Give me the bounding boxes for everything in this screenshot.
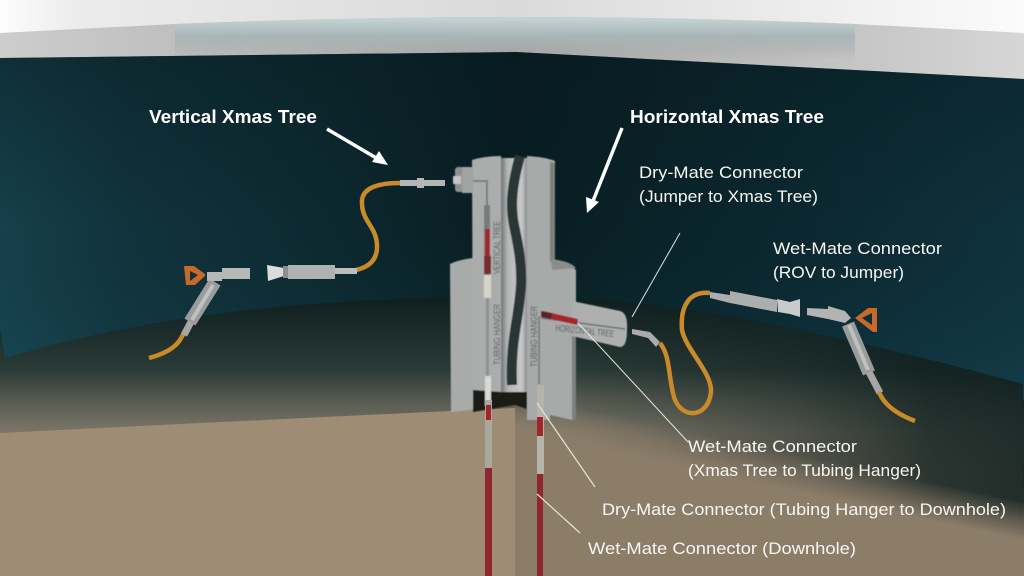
label: tubing hanger left: TUBING HANGER [492, 304, 503, 365]
label: dry-mate hanger to downhole: Dry-Mate Connector (Tubing Hanger to Downhole) [602, 501, 1006, 519]
angled steel body [848, 324, 880, 393]
ceiling band [0, 0, 1024, 60]
flared head [777, 299, 800, 317]
horizontal tree arm [541, 301, 627, 347]
pipe: vertical tree and hanger [473, 181, 491, 406]
orange tail cable [149, 333, 184, 358]
curved teal wall [0, 52, 1024, 400]
right flange [550, 259, 576, 420]
angled steel body [184, 282, 215, 335]
ledge above wall [0, 17, 1024, 85]
left upper cylinder [472, 156, 501, 392]
orange handle [184, 266, 205, 285]
central wellhead cutaway [450, 156, 627, 420]
steel plug [207, 268, 250, 281]
jumper cable [356, 183, 400, 270]
leader: hanger to downhole [537, 403, 595, 487]
leader: tree to hanger [578, 323, 688, 442]
right jumper [632, 291, 800, 413]
steel plug [807, 306, 851, 323]
left flange [450, 258, 473, 412]
dry-mate end [400, 178, 445, 188]
downhole string right [537, 385, 544, 576]
label: dry-mate jumper to tree: (Jumper to Xmas Tree) [639, 188, 818, 206]
jumper cable [660, 293, 711, 413]
downhole string left [485, 400, 492, 576]
orange tail cable [879, 392, 915, 421]
dry-mate end [632, 329, 660, 347]
label: wet-mate tree to hanger: (Xmas Tree to Tubing Hanger) [688, 462, 921, 480]
orange handle [855, 308, 877, 332]
pipe: horizontal tree hanger [538, 316, 540, 384]
label: wet-mate downhole: Wet-Mate Connector (Downhole) [588, 540, 856, 558]
leader: downhole [537, 494, 580, 533]
heading: horizontal xmas tree: Horizontal Xmas Tree [630, 107, 824, 127]
steel connector [710, 291, 777, 312]
left ROV connector assembly [149, 266, 250, 358]
seabed floor [0, 296, 1024, 576]
label: tubing hanger right: TUBING HANGER [529, 306, 540, 367]
heading: vertical xmas tree: Vertical Xmas Tree [149, 107, 317, 127]
label: wet-mate rov to jumper: (ROV to Jumper) [773, 264, 904, 282]
label: wet-mate rov to jumper: Wet-Mate Connector [773, 240, 943, 258]
leader: jumper to tree [632, 233, 680, 317]
right ROV connector assembly [807, 306, 915, 421]
left jumper [267, 178, 445, 281]
cavity at base [473, 390, 550, 420]
sand layer [0, 396, 1024, 576]
dark wavy bore strip [512, 156, 521, 385]
vertical tree flange connector [453, 167, 473, 193]
arrow: vertical tree [327, 129, 388, 165]
label: dry-mate jumper to tree: Dry-Mate Connector [639, 164, 804, 182]
label: vertical tree: VERTICAL TREE [492, 221, 503, 274]
label: horizontal tree: HORIZONTAL TREE [555, 323, 615, 340]
right upper cylinder [527, 156, 555, 420]
arrow: horizontal tree [586, 128, 622, 213]
red horizontal connector [541, 311, 578, 325]
neck [335, 268, 357, 274]
back wall of bore [501, 158, 527, 392]
male head [288, 265, 335, 279]
label: wet-mate tree to hanger: Wet-Mate Connector [688, 438, 858, 456]
flared wet-mate head [267, 265, 284, 281]
